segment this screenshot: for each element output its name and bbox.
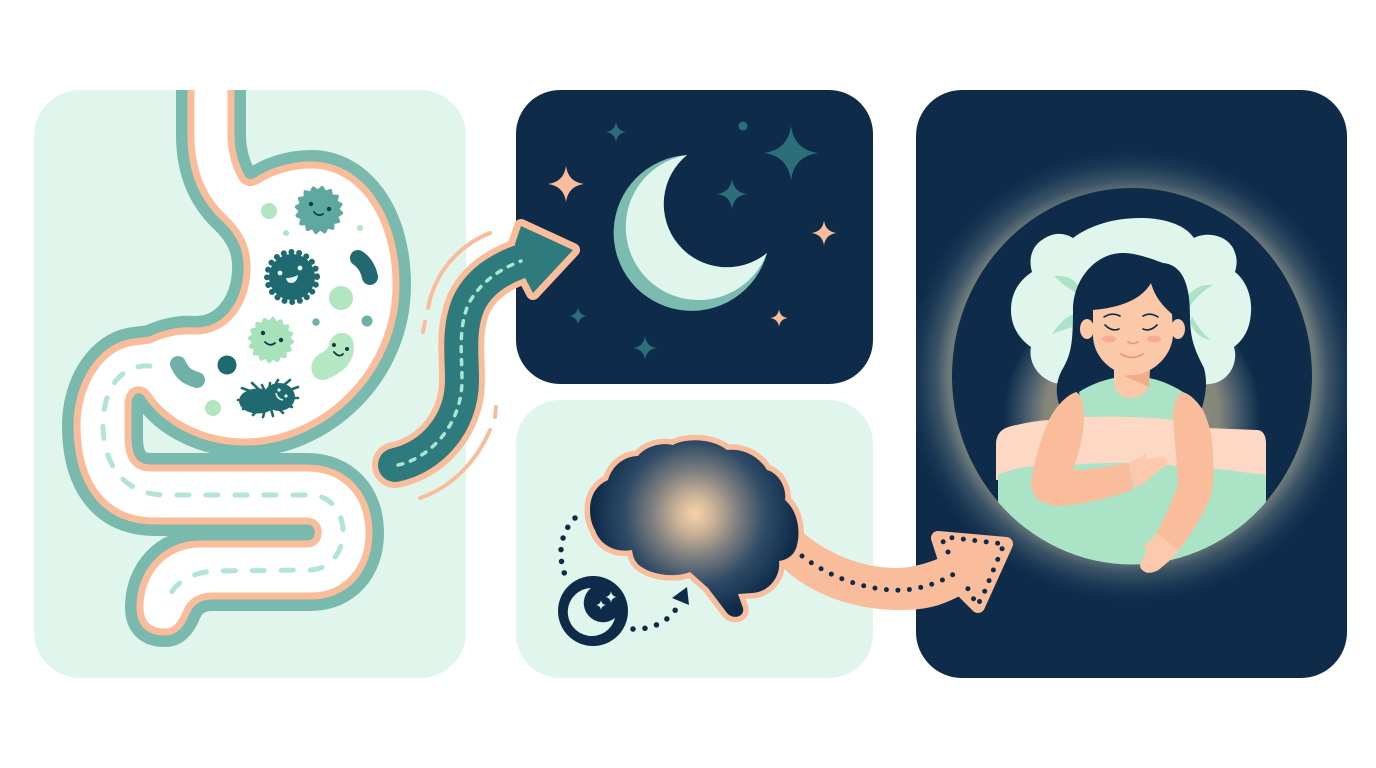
badge stars (596, 592, 616, 610)
bacterium: light bean with face (311, 333, 354, 380)
panel: sleeping person background (916, 90, 1347, 678)
glow halo (906, 150, 1358, 602)
arrow head outline (515, 226, 573, 293)
bacterium: teal bean (178, 364, 197, 380)
sleeping person scene (906, 150, 1358, 602)
pillow (1011, 218, 1251, 385)
moon badge (558, 576, 628, 646)
arrow dotted line head (943, 537, 1004, 605)
neck shadow (1124, 370, 1150, 387)
hair (1057, 253, 1206, 408)
gut flow dashes (103, 366, 343, 600)
bacterium: teal spiky (294, 185, 344, 235)
facial features (1104, 314, 1158, 358)
face (1093, 283, 1173, 375)
bacterium: dark rod with hairs (238, 380, 298, 417)
right hand (1140, 533, 1179, 573)
stars peach (548, 166, 836, 327)
pillow folds (1052, 276, 1213, 340)
arrow dashes (398, 261, 521, 465)
arrow outline (395, 260, 525, 465)
bacterium: light spiky (248, 317, 294, 363)
stomach and intestine illustration (77, 80, 396, 632)
night sky contents (548, 122, 836, 360)
inner glow (1008, 346, 1257, 430)
cycle arrowhead (672, 587, 689, 605)
gut inner lining (77, 80, 396, 632)
bacterium: dark spiky (267, 252, 317, 302)
crescent moon shadow (614, 155, 767, 311)
badge crescent (568, 588, 615, 636)
arrow head (515, 226, 573, 293)
brain illustration (590, 440, 798, 617)
gut outer wall (77, 80, 396, 632)
arrow body (395, 260, 525, 465)
blush (1102, 336, 1161, 342)
dark circle behind person (952, 188, 1312, 502)
neck (1114, 370, 1148, 398)
arrow: gut to night sky (395, 226, 573, 498)
sleep moon cycle icon (558, 518, 689, 646)
crescent moon (626, 155, 767, 300)
pale torso band (1071, 414, 1176, 466)
small microbe dots (205, 203, 372, 416)
arrow dotted line body (802, 556, 954, 590)
panel: night sky (516, 90, 873, 384)
ears (1080, 319, 1185, 339)
shirt (1079, 378, 1183, 420)
stars teal (569, 122, 818, 360)
arrow motion lines (420, 233, 496, 498)
blanket (998, 462, 1266, 564)
gut bacteria (178, 185, 372, 417)
bacterium: dark bean (358, 258, 370, 277)
arrow body and head (785, 530, 1006, 606)
panel: gut background (34, 90, 466, 678)
left hand (1129, 453, 1167, 488)
left arm (1031, 392, 1133, 506)
dotted cycle lower (633, 609, 676, 629)
right arm (1156, 392, 1213, 550)
panel: brain background (516, 400, 873, 678)
dotted cycle upper (561, 518, 575, 575)
bed headboard (996, 420, 1266, 480)
peach arrow: brain to sleeping person (785, 530, 1006, 606)
bacterium: dark circle (218, 356, 236, 374)
